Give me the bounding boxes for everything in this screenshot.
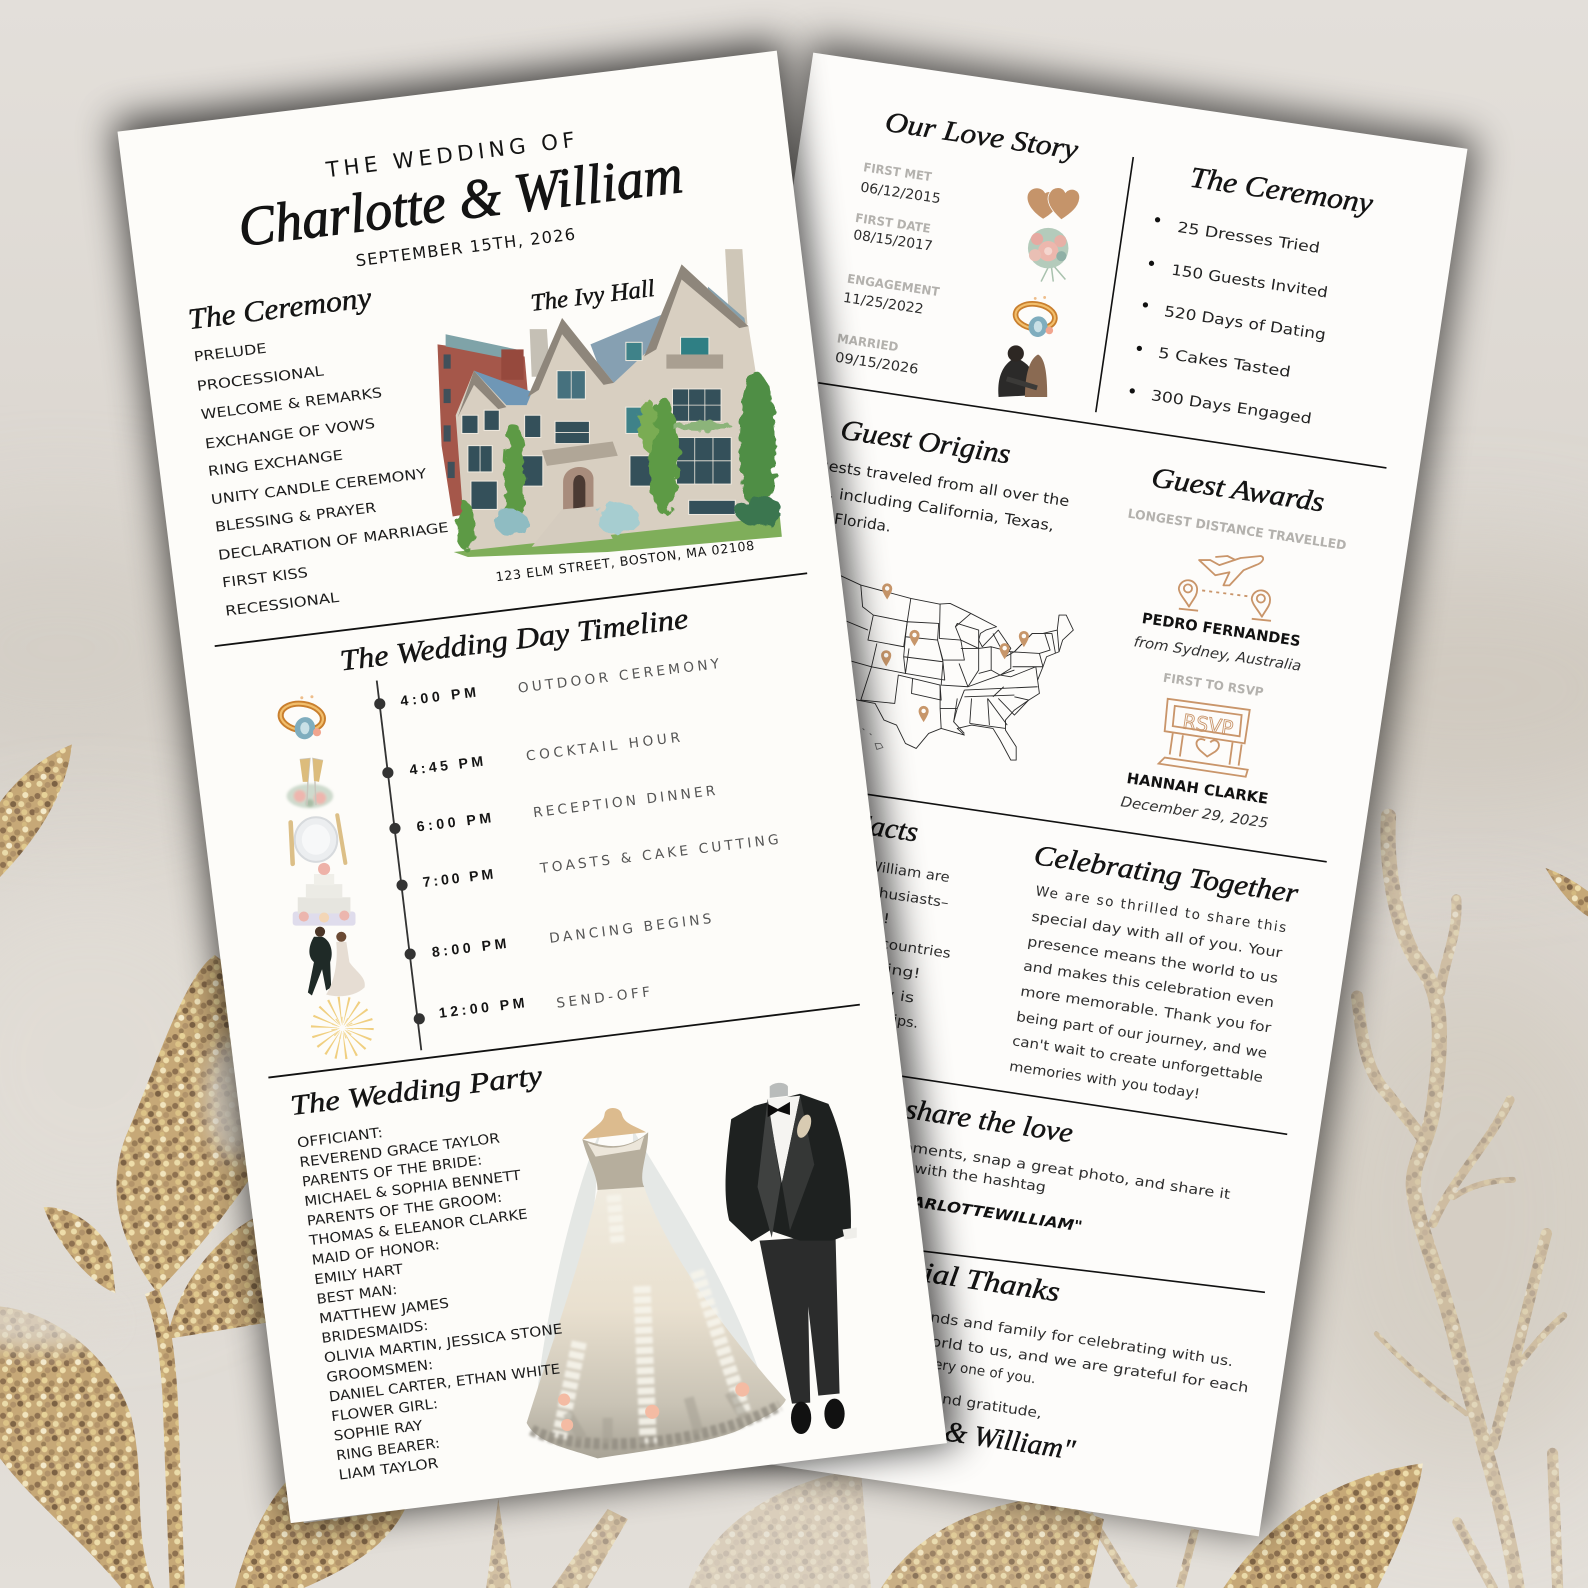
title: Charlotte and William: Charlotte & William [235,143,686,259]
icon: fireworks [324,1010,361,1046]
wedding party list: PARENTS OF THE GROOM: [306,1190,503,1230]
text: fun facts: full of road trips. [799,999,919,1032]
wedding party list: PARENTS OF THE BRIDE: [301,1153,483,1191]
wedding party list: THOMAS & ELEANOR CLARKE [307,1206,529,1249]
love story dates: ENGAGEMENT [846,272,941,299]
wedding party list: OLIVIA MARTIN, JESSICA STONE [323,1321,563,1366]
text: celebrating together paragraph: special day with all of you. Your [1030,909,1284,962]
wedding party list: REVEREND GRACE TAYLOR [299,1130,501,1171]
award label: first to RSVP: FIRST TO RSVP [1162,671,1265,699]
timeline: events: SEND-OFF [556,984,651,1012]
text: celebrating together paragraph: can't wait to create unforgettable [1011,1033,1264,1086]
wedding party list: EMILY HART [313,1261,405,1288]
heading: Snap and share the love: Snap & share the love [805,1079,1075,1149]
text: fun facts: They visited 12 countries [758,918,952,962]
text: special thanks: With love and gratitude, [855,1379,1043,1422]
text: celebrating together paragraph: We are so thrilled to share this [1034,883,1287,936]
icon: champagne flutes [287,759,333,808]
icon: engagement ring [1014,296,1057,339]
wedding party list: BRIDESMAIDS: [321,1318,429,1347]
love story dates: FIRST DATE [854,211,932,236]
decoration: gold glitter leaves bottom [486,1463,1423,1588]
love story dates: 09/15/2026 [834,350,919,378]
illustration: Ivy Hall mansion [438,249,784,557]
wedding party list: MATTHEW JAMES [318,1296,450,1327]
icon: RSVP sign [1159,699,1250,777]
award winner: Pedro Fernandes: from Sydney, Australia [1133,634,1302,675]
award winner: Hannah Clarke: December 29, 2025 [1120,794,1269,832]
love story dates: 11/25/2022 [842,290,925,318]
wedding party list: FLOWER GIRL: [330,1396,439,1425]
wedding stats list [1130,217,1329,428]
wedding party list: DANIEL CARTER, ETHAN WHITE [328,1361,561,1406]
chart: US map with guest pins [822,573,1073,760]
icon: plate and cutlery [291,815,345,864]
award winner: Hannah Clarke: HANNAH CLARKE [1126,770,1269,808]
wedding party list: BEST MAN: [316,1282,398,1308]
ceremony order list: UNITY CANDLE CEREMONY [210,466,428,508]
love story dates: MARRIED [836,331,899,354]
heading: Our Love Story: Our Love Story [883,107,1080,166]
decoration: pale gold twigs right [1357,816,1564,1588]
timeline: times: 4:45 PM [409,754,484,779]
text: share the love: Capture the moments, snap a great photo, and share it [786,1122,1232,1203]
address: 123 ELM STREET, BOSTON, MA 02108 [495,538,755,584]
text: celebrating together paragraph: more memorable. Thank you for [1019,984,1272,1037]
timeline: times: 7:00 PM [422,867,494,891]
award winner: Hannah Clarke [1120,770,1269,832]
icon: couple from behind [998,345,1047,397]
wedding party list: SOPHIE RAY [333,1418,424,1445]
wedding party list [296,1125,563,1484]
heading: Celebrating Together: Celebrating Together [1032,840,1301,910]
date: SEPTEMBER 15TH, 2026 [355,225,576,270]
text: fun facts: before marrying! [774,945,921,982]
ceremony order list: PRELUDE [193,341,267,366]
timeline: times: 8:00 PM [431,936,507,961]
text: share the love: "#CHARLOTTEWILLIAM" [866,1187,1084,1235]
love story dates: 08/15/2017 [852,227,934,255]
panel: right card [605,53,1467,1536]
text: celebrating together paragraph: being part of our journey, and we [1015,1009,1268,1062]
love story dates: FIRST MET [862,160,933,184]
timeline: events: TOASTS & CAKE CUTTING [538,832,780,877]
text: special thanks: Thank you to all our friends and family for celebrating with us. [740,1282,1234,1370]
heading: Guest Awards: Guest Awards [1149,462,1326,518]
heading: The Wedding Day Timeline: The Wedding Day Timeline [338,603,690,677]
illustration: wedding dress [527,1108,786,1458]
venue name: The Ivy Hall: The Ivy Hall [529,275,656,317]
heading: The Wedding Of: THE WEDDING OF [324,128,576,183]
text: celebrating together paragraph: presence means the world to us [1026,934,1279,987]
timeline: events: COCKTAIL HOUR [525,730,681,765]
timeline: times: 12:00 PM [438,995,525,1022]
ceremony order list: BLESSING & PRAYER [214,500,378,536]
wedding party list: LIAM TAYLOR [338,1455,440,1484]
text: special thanks: You mean the world to us, and we are grateful for each [800,1315,1249,1396]
ceremony order list: RING EXCHANGE [207,448,344,480]
ceremony order list [193,341,449,620]
wedding party list: MAID OF HONOR: [311,1237,441,1269]
icon: two hearts [1028,188,1080,220]
text: fun facts: Charlotte & William are [778,845,951,886]
text: share the love [786,1122,1232,1235]
signature: Charlotte and William: "Charlotte & William" [814,1397,1077,1466]
text: celebrating together paragraph [1008,883,1287,1103]
shadow: left card [113,41,958,1523]
love story dates: 06/12/2015 [859,180,942,207]
decoration: gold glitter leaves left [0,744,405,1588]
icon: ring [279,695,325,742]
text: guest origins description: and Florida. [799,506,892,536]
text: fun facts: Their story is [796,974,915,1007]
heading: The Ceremony (stats): The Ceremony [1188,162,1376,220]
icon: RSVP sign: RSVP [1181,709,1235,741]
love story dates [834,160,942,378]
wedding stats list: 5 Cakes Tasted [1157,345,1292,381]
text: special thanks: and every one of you. [887,1350,1037,1387]
award winner: Pedro Fernandes [1133,610,1302,675]
text: guest origins description: Our guests traveled from all over the [773,450,1070,510]
ceremony order list: RECESSIONAL [224,590,340,620]
heading: The Ceremony: The Ceremony [186,282,374,336]
wedding party list: MICHAEL & SOPHIA BENNETT [304,1168,522,1210]
icon: dancing couple [308,927,365,996]
icon: wedding cake [293,863,355,926]
text: guest origins description: country, including California, Texas, [766,476,1055,535]
panel: left card [117,51,947,1523]
timeline: times: 6:00 PM [416,810,492,835]
ceremony order list: FIRST KISS [221,565,309,591]
wedding party list: RING BEARER: [335,1436,441,1464]
text: celebrating together paragraph: memories with you today! [1008,1059,1201,1103]
timeline: events [517,656,780,1012]
text: fun facts [758,845,952,1032]
timeline: events: DANCING BEGINS [548,911,712,947]
decoration: gold leaf right edge [1545,868,1588,917]
award winner: Pedro Fernandes: PEDRO FERNANDES [1141,610,1302,650]
wedding stats list: 25 Dresses Tried [1176,219,1321,257]
ceremony order list: PROCESSIONAL [196,363,325,395]
timeline: spine with dots [374,681,425,1050]
shadow: right card [605,41,1477,1534]
divider: vertical [1096,157,1133,412]
icon: plane and pins [1179,556,1271,621]
heading: The Wedding Party: The Wedding Party [289,1060,544,1122]
award label: longest distance: LONGEST DISTANCE TRAVELLED [1127,506,1347,553]
timeline: events: RECEPTION DINNER [532,783,717,821]
wedding party list: GROOMSMEN: [326,1357,434,1386]
ceremony order list: WELCOME & REMARKS [200,385,383,423]
timeline: events: OUTDOOR CEREMONY [517,656,721,697]
text: share the love: on social media with the hashtag [786,1142,1047,1196]
text: fun facts: over 500 cups! [758,893,891,928]
illustration: groom tuxedo [726,1083,857,1434]
heading: Guest Origins: Guest Origins [839,415,1012,470]
wedding stats list: 150 Guests Invited [1170,262,1329,301]
icon: bouquet [1028,228,1068,282]
text: fun facts: avid coffee enthusiasts– [765,869,950,911]
text: celebrating together paragraph: and makes this celebration even [1022,958,1275,1011]
heading: Special Thanks: Special Thanks [861,1249,1062,1308]
text: special thanks [740,1282,1249,1422]
text: guest origins description [766,450,1070,536]
wedding party list: OFFICIANT: [296,1125,384,1151]
timeline: times [400,685,525,1022]
ceremony order list: EXCHANGE OF VOWS [204,416,376,453]
wedding stats list: 300 Days Engaged [1150,387,1313,428]
heading: Fun Facts: Fun Facts [794,800,920,849]
wedding stats list: 520 Days of Dating [1163,303,1327,344]
timeline: times: 4:00 PM [400,685,477,710]
ceremony order list: DECLARATION OF MARRIAGE [217,520,449,564]
